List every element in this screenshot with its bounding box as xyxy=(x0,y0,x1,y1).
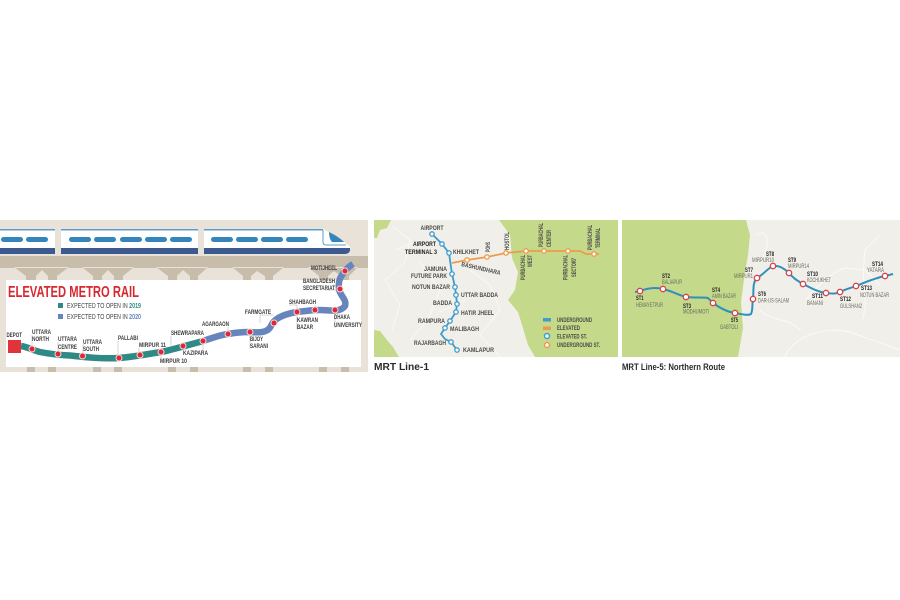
station labels: BAZAR xyxy=(297,324,313,331)
station labels: ST5 xyxy=(731,317,738,324)
station labels: YATARA xyxy=(867,268,884,274)
station labels: SHEWRAPARA xyxy=(171,330,204,337)
car 3 with nose xyxy=(204,229,350,254)
depot xyxy=(6,332,22,353)
station labels: UTTARA xyxy=(32,329,51,336)
station labels: GABTOLI xyxy=(720,325,738,331)
station labels: NORTH xyxy=(32,336,49,343)
panel: MRT Line-5 map xyxy=(622,220,900,357)
station labels: HOSTOL xyxy=(504,232,511,250)
legend: EXPECTED TO OPEN IN 2020 xyxy=(67,312,141,321)
station labels: BASHUNDHARA xyxy=(461,261,502,277)
caption: MRT Line-1: MRT Line-1 xyxy=(374,362,429,373)
legend xyxy=(58,301,141,321)
train xyxy=(0,229,350,254)
station labels: HATIR JHEEL xyxy=(461,310,494,317)
metro route line xyxy=(21,264,353,358)
station labels: KAWRAN xyxy=(297,317,318,324)
station labels: PURBACHAL xyxy=(562,255,570,280)
station labels: CENTER xyxy=(546,230,553,247)
underground line xyxy=(432,234,457,350)
elevated viaduct beam xyxy=(0,256,368,280)
station labels: BIJOY xyxy=(250,336,263,343)
station labels: MIRPUR14 xyxy=(788,264,809,270)
station labels: RAMPURA xyxy=(418,318,445,325)
station labels: DAR-US-SALAM xyxy=(758,298,789,304)
station labels: ST7 xyxy=(745,267,753,274)
station labels: AIRPORT xyxy=(413,241,436,248)
station labels: ST2 xyxy=(662,273,670,280)
legend: ELEVATED ST. xyxy=(557,334,587,340)
station labels: ST13 xyxy=(861,285,872,292)
pillar bases xyxy=(27,367,349,372)
station labels: WEST xyxy=(527,255,534,267)
station labels: MIRPUR 11 xyxy=(139,342,166,349)
station labels: ST9 xyxy=(788,257,796,264)
station labels: BADDA xyxy=(433,300,452,307)
station labels: UTTAR BADDA xyxy=(461,292,498,299)
station labels: ST11 xyxy=(812,293,823,300)
car 1 xyxy=(0,229,55,254)
station labels: SECRETARIAT xyxy=(303,285,335,292)
station markers xyxy=(29,268,348,361)
station labels: ST4 xyxy=(712,287,720,294)
station labels: MALIBAGH xyxy=(450,326,479,333)
white map area xyxy=(6,280,361,367)
road lines xyxy=(757,233,900,357)
station labels: SECTOR7 xyxy=(571,258,578,277)
road lines xyxy=(385,226,500,357)
station labels: KAZIPARA xyxy=(183,350,208,357)
station labels: SOUTH xyxy=(83,346,99,353)
station labels xyxy=(636,251,889,331)
elevated stations xyxy=(465,249,596,262)
station labels: GULSHAN2 xyxy=(840,304,862,310)
station labels: UNIVERSITY xyxy=(334,322,363,329)
station labels: FARMGATE xyxy=(245,309,272,316)
station labels: SARANI xyxy=(250,343,268,350)
station labels: MOTIJHEEL xyxy=(311,265,337,272)
legend: UNDERGROUND ST. xyxy=(557,342,600,349)
panel: elevated metro rail xyxy=(0,220,368,372)
station labels: BANGLADESH xyxy=(303,278,335,285)
station labels: NOTUN BAZAR xyxy=(412,284,450,291)
station labels: TERMINAL xyxy=(595,228,602,248)
station labels: MIRPUR10 xyxy=(752,258,774,264)
station labels: ST14 xyxy=(872,261,883,268)
depot: DEPOT xyxy=(6,332,22,339)
line 5 route xyxy=(635,266,893,315)
station labels: BALIAPUR xyxy=(662,280,682,286)
station labels: AIRPORT xyxy=(420,225,444,232)
station labels xyxy=(405,223,602,354)
panel: MRT Line-1 map xyxy=(374,220,618,357)
green area xyxy=(622,220,750,357)
station labels: KOCHUKHET xyxy=(807,278,831,284)
elevated line xyxy=(452,251,599,263)
station labels: ST3 xyxy=(683,303,691,310)
station labels: HEMAYETPUR xyxy=(636,303,663,309)
station labels: FUTURE PARK xyxy=(411,273,447,280)
station labels: UTTARA xyxy=(58,336,77,343)
station labels: KHILKHET xyxy=(453,249,479,256)
station labels: ST1 xyxy=(636,295,644,302)
station labels: DHAKA xyxy=(334,314,350,321)
station labels: CENTRE xyxy=(58,344,78,351)
caption: MRT Line-5: MRT Line-5: Northern Route xyxy=(622,362,725,373)
station labels: JAMUNA xyxy=(424,266,447,273)
legend xyxy=(543,317,600,349)
station labels: MODHUMOTI xyxy=(683,310,709,316)
station labels: KAMLAPUR xyxy=(463,347,494,354)
title: ELEVATED METRO RAIL xyxy=(8,284,139,301)
car 2 xyxy=(61,229,198,254)
station labels: PALLABI xyxy=(118,335,138,342)
station labels: ST10 xyxy=(807,271,818,278)
station labels: ST6 xyxy=(758,291,766,298)
station labels: AMIN BAZAR xyxy=(712,294,736,300)
leader lines xyxy=(32,271,345,358)
station labels xyxy=(32,265,363,365)
station labels: TERMINAL 3 xyxy=(405,249,437,256)
station labels: PURBACHAL xyxy=(520,255,527,280)
legend: EXPECTED TO OPEN IN 2019 xyxy=(67,301,141,310)
legend: ELEVATED xyxy=(557,325,580,332)
legend: UNDERGROUND xyxy=(557,317,592,324)
station labels: ST12 xyxy=(840,296,851,303)
station labels: UTTARA xyxy=(83,339,102,346)
station labels: PURBACHAL xyxy=(587,225,594,250)
green areas xyxy=(374,220,618,357)
station labels: ST8 xyxy=(766,251,774,258)
station labels: PURBACHAL xyxy=(538,223,545,247)
station labels: MIRPUR1 xyxy=(734,274,753,280)
station labels: BANANI xyxy=(807,301,823,307)
station labels: RAJARBAGH xyxy=(414,340,446,347)
station labels: SHAHBAGH xyxy=(289,299,316,306)
station labels: POHS xyxy=(485,242,492,252)
underground stations xyxy=(430,232,459,352)
station labels: MIRPUR 10 xyxy=(160,358,187,365)
stations xyxy=(637,263,888,316)
station labels: AGARGAON xyxy=(202,321,229,328)
